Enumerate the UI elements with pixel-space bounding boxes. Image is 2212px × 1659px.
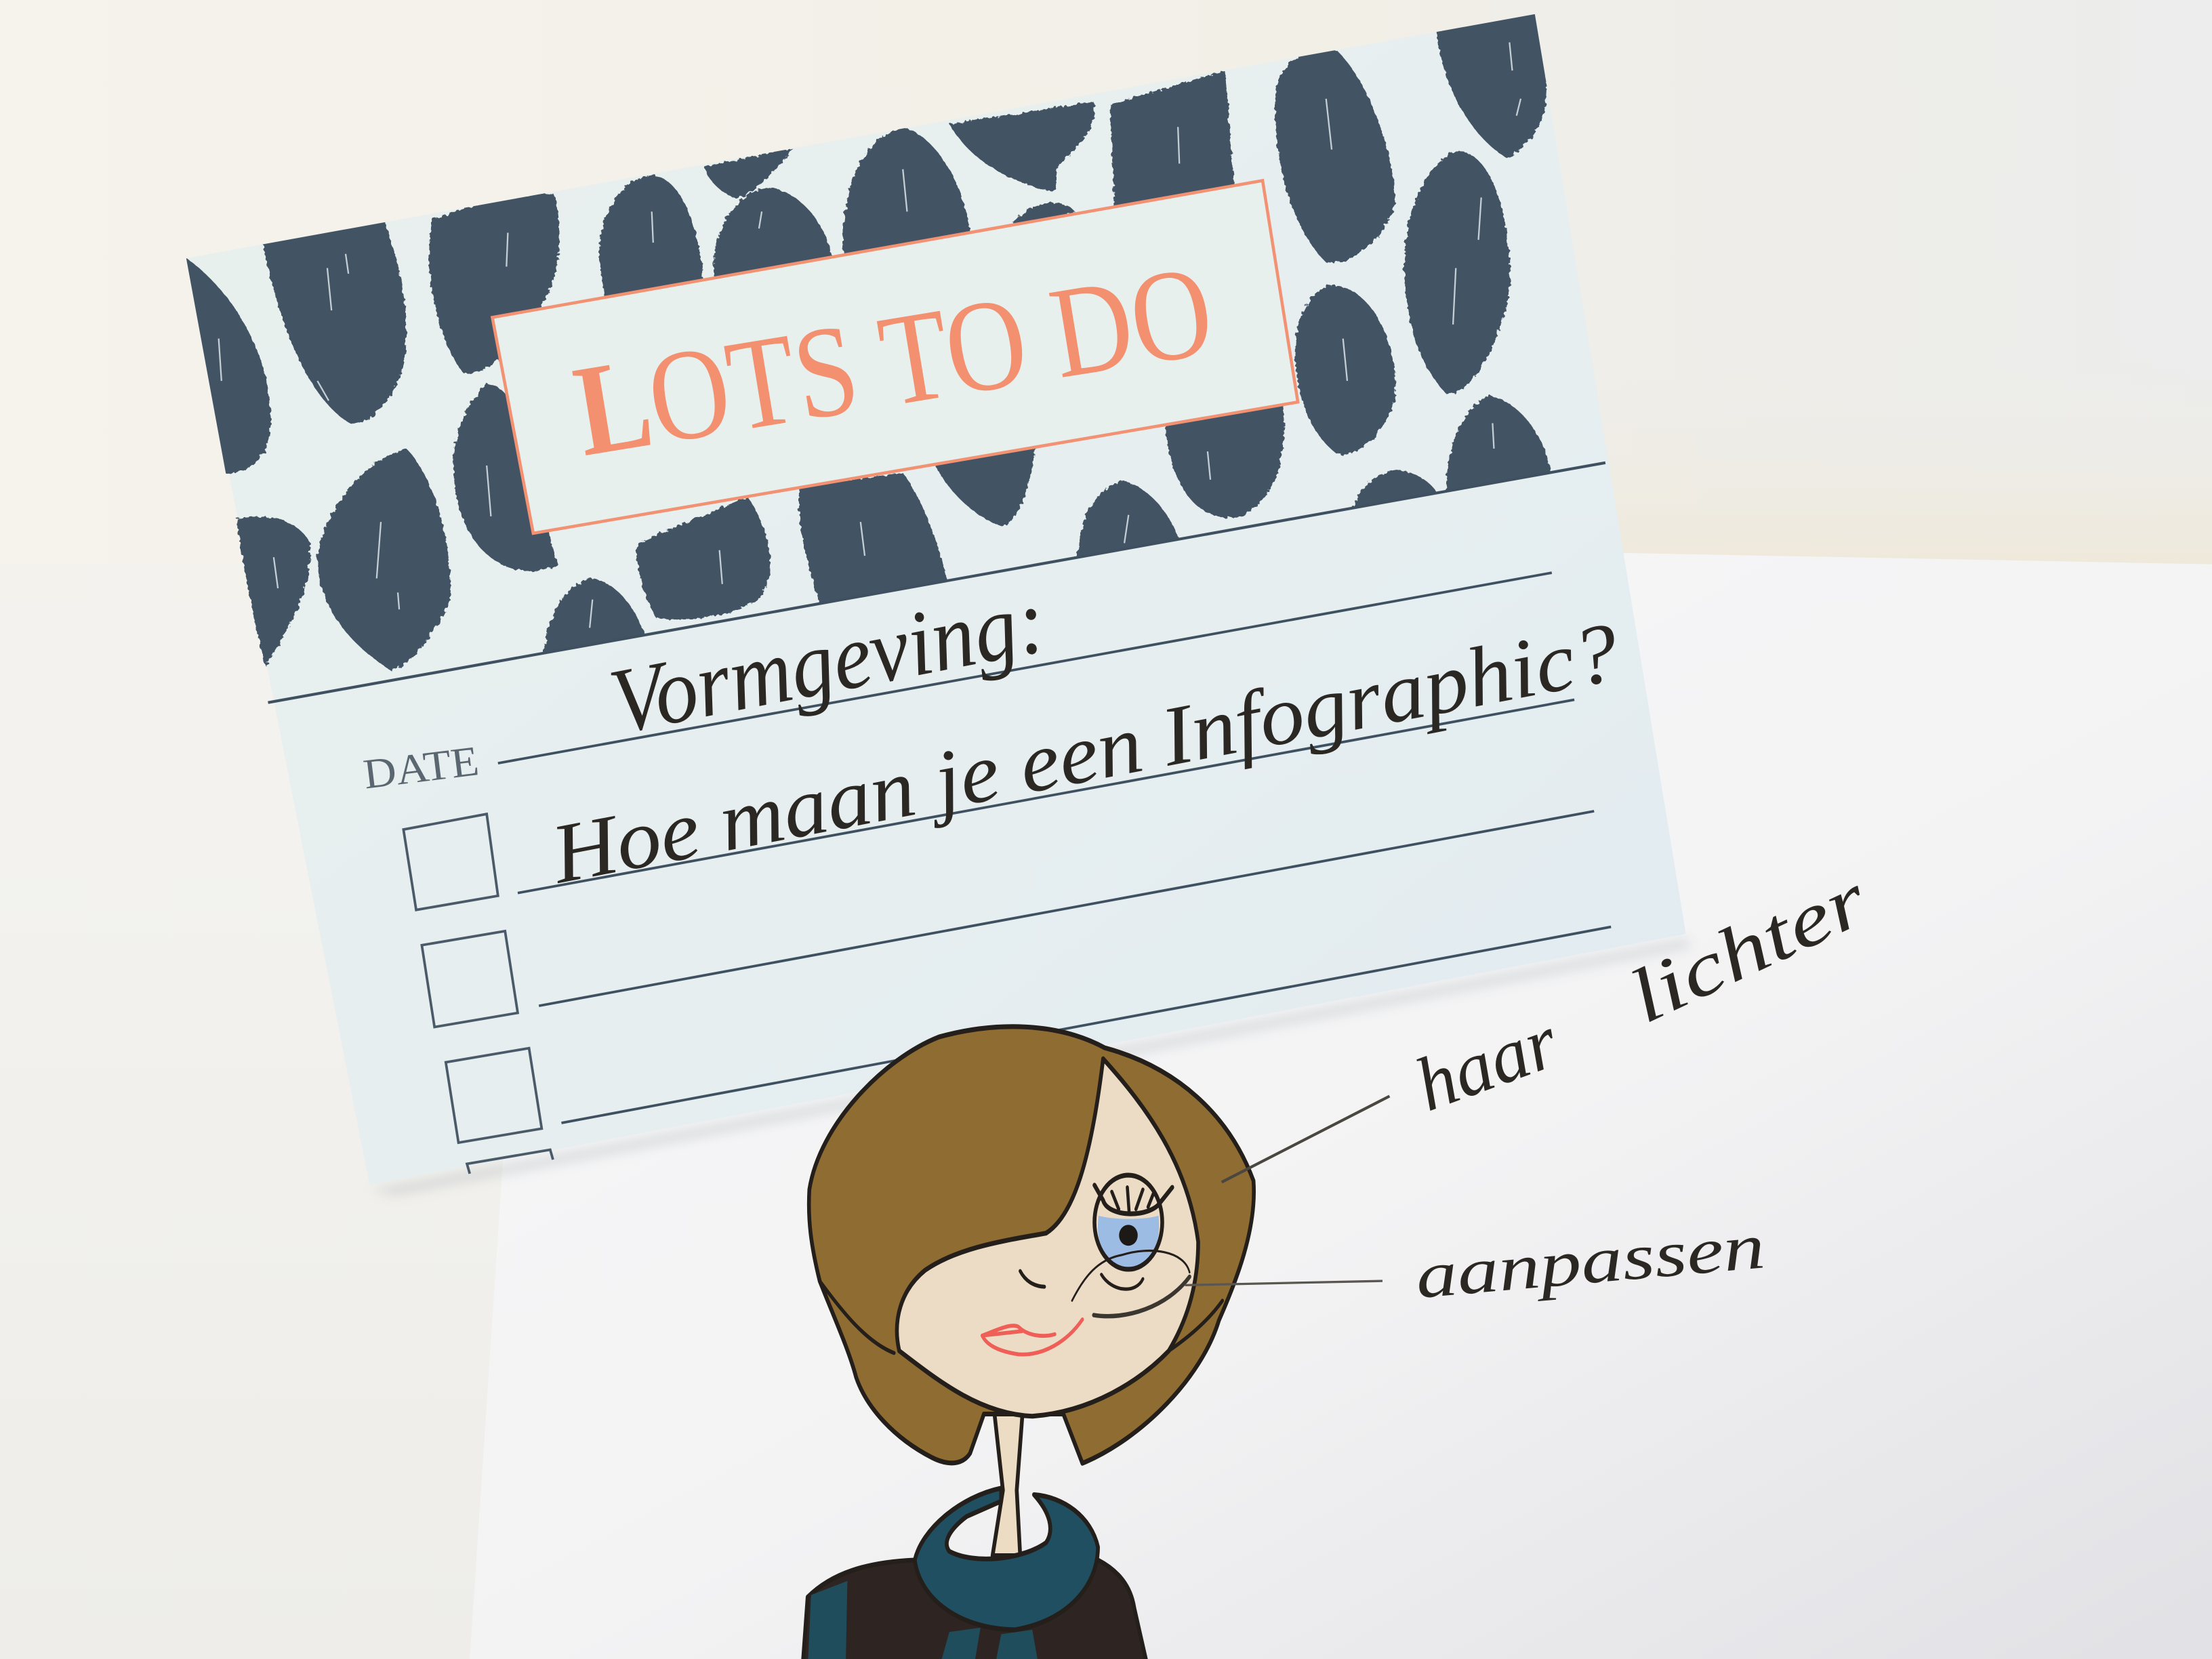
annotation line: hair	[1222, 1096, 1389, 1182]
torso	[802, 1560, 1148, 1659]
handwriting: lichter: lichter	[1616, 857, 1881, 1040]
pattern: dark blue painted blobs	[169, 7, 1552, 680]
date label: DATE	[361, 737, 481, 798]
face	[897, 1059, 1198, 1416]
checkbox 2	[422, 931, 518, 1027]
card shadow	[369, 938, 1690, 1196]
header rule	[268, 463, 1605, 703]
orange title box	[492, 180, 1298, 533]
eye	[1094, 1175, 1172, 1289]
handwriting: Vormgeving: Vormgeving:	[602, 569, 1054, 754]
nose and wrinkle sketch	[1072, 1251, 1189, 1300]
ruled lines	[498, 573, 1611, 1123]
handwriting: question: Hoe maan je een Infographic?	[543, 605, 1626, 902]
panel: to-do card	[169, 7, 1686, 1185]
lips	[982, 1319, 1082, 1355]
handwriting: haar: haar	[1405, 999, 1570, 1128]
annotation line: adjust	[1185, 1281, 1382, 1285]
handwriting: aanpassen: aanpassen	[1413, 1210, 1767, 1312]
character illustration	[802, 1027, 1254, 1659]
turtleneck collar	[915, 1488, 1098, 1630]
cheek pen line	[1094, 1277, 1189, 1316]
white envelope sheet	[470, 553, 2212, 1659]
white scratches in paint	[219, 42, 1521, 628]
hair	[809, 1027, 1254, 1463]
neck	[993, 1412, 1023, 1556]
checkbox 4 partial	[467, 1150, 553, 1174]
hair strand outline	[820, 1281, 1223, 1353]
title: LOTS TO DO: LOTS TO DO	[565, 237, 1222, 484]
checkbox 3	[446, 1048, 541, 1143]
checkbox 1	[403, 814, 498, 910]
closed eye	[1020, 1271, 1044, 1287]
